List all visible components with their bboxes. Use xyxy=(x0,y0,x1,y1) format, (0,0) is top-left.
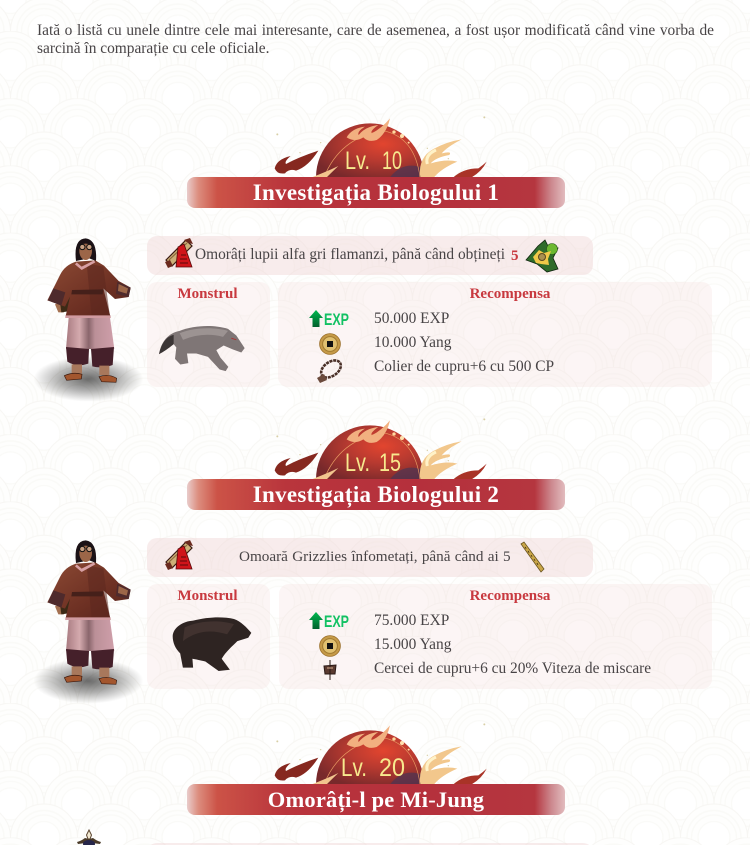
section 2 quest bar xyxy=(147,538,593,577)
reward: earring: Cercei de cupru+6 cu 20% Viteza de miscare xyxy=(374,660,651,677)
section 1 level emblem: Lv. xyxy=(345,147,370,175)
monster: wolf xyxy=(159,326,245,372)
icon: coin xyxy=(319,333,341,355)
section 1 level emblem: 10 xyxy=(382,147,402,175)
heading: reward: Recompensa xyxy=(470,286,550,302)
section 3 title banner xyxy=(187,784,565,815)
intro text: Iată o listă cu unele dintre cele mai interesante, care de asemenea, a fost ușor modificată când vine vorba de xyxy=(37,22,714,39)
icon: flower item xyxy=(525,239,559,272)
heading: monster: Monstrul xyxy=(178,588,238,604)
icon: earring xyxy=(323,660,337,680)
section 2 character xyxy=(36,540,140,702)
section 3 title banner: Omorâți-l pe Mi-Jung xyxy=(268,787,484,812)
reward: exp amount: 75.000 EXP xyxy=(374,612,449,629)
quest count: 5 xyxy=(511,248,518,264)
heading: reward: Recompensa xyxy=(470,588,550,604)
section 2 level emblem: 15 xyxy=(379,449,401,477)
icon: wooden stick item xyxy=(520,542,544,573)
section 1 title banner xyxy=(187,177,565,208)
reward: yang amount: 10.000 Yang xyxy=(374,334,451,351)
section 1 character xyxy=(36,238,140,400)
icon: scroll xyxy=(165,540,193,570)
section 2 level emblem: Lv. xyxy=(345,449,370,477)
heading: monster: Monstrul xyxy=(178,286,238,302)
quest text: Omoară Grizzlies înfometați, până când ai 5 xyxy=(239,548,511,565)
section 1 title banner: Investigația Biologului 1 xyxy=(253,180,499,205)
section 3 character head xyxy=(77,829,101,845)
reward: exp amount: 50.000 EXP xyxy=(374,310,449,327)
icon: necklace xyxy=(317,359,342,383)
icon: exp: EXP xyxy=(324,612,349,631)
section 2 title banner: Investigația Biologului 2 xyxy=(253,482,499,507)
section 1 quest bar xyxy=(147,236,593,275)
icon: scroll xyxy=(165,238,193,268)
section 3 level emblem: 20 xyxy=(379,754,405,782)
section 3 quest bar xyxy=(147,843,593,845)
section 1 monster panel xyxy=(147,282,270,387)
section 2 monster panel xyxy=(147,584,270,689)
reward: yang amount: 15.000 Yang xyxy=(374,636,451,653)
icon: exp xyxy=(309,612,349,631)
quest text: Omorâți lupii alfa gri flamanzi, până când obțineți xyxy=(195,246,505,263)
intro text: sarcină în comparație cu cele oficiale. xyxy=(37,40,269,57)
section 2 reward panel xyxy=(279,584,712,689)
icon: exp: EXP xyxy=(324,310,349,329)
monster: bear xyxy=(172,617,252,671)
section 2 level emblem xyxy=(274,418,486,479)
section 3 level emblem: Lv. xyxy=(341,754,367,782)
icon: exp xyxy=(309,310,349,329)
section 1 reward panel xyxy=(278,282,712,387)
section 1 level emblem xyxy=(274,116,486,177)
icon: coin xyxy=(319,635,341,657)
intro text xyxy=(37,22,714,57)
section 3 level emblem xyxy=(274,723,486,784)
reward: necklace: Colier de cupru+6 cu 500 CP xyxy=(374,358,554,375)
section 2 title banner xyxy=(187,479,565,510)
